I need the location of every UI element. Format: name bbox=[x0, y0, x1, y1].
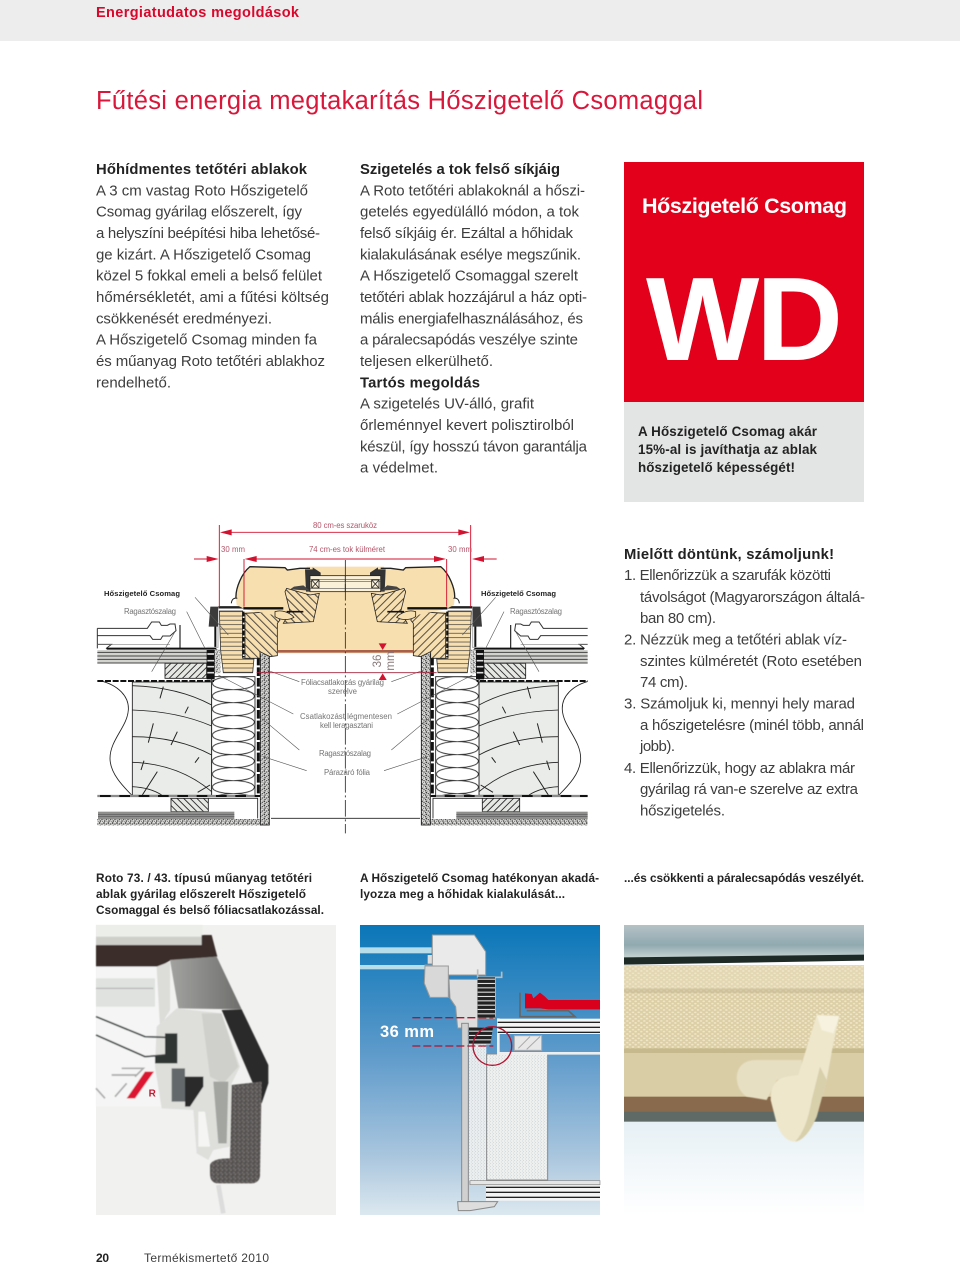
panel note: hőszigetelő képességét! bbox=[638, 460, 795, 475]
panel note: A Hőszigetelő Csomag akár bbox=[638, 424, 818, 439]
text block: thermal-bridge-free roof windows: hőmérsékletét, ami a fűtési költség bbox=[96, 289, 329, 306]
text block: insulation at frame top plane: a védelmet. bbox=[360, 460, 438, 477]
diagram dimension labels bbox=[221, 521, 472, 671]
caption: photo 2: lyozza meg a hőhidak kialakulását... bbox=[360, 887, 565, 901]
technical section diagram bbox=[97, 521, 601, 833]
text block: insulation at frame top plane: A Roto tetőtéri ablakoknál a hőszi- bbox=[360, 182, 585, 199]
diagram callout labels bbox=[104, 589, 562, 777]
diagram callout labels: Ragasztószalag bbox=[319, 749, 371, 758]
text block: thermal-bridge-free roof windows: A Hőszigetelő Csomag minden fa bbox=[96, 332, 318, 349]
section label: Energiatudatos megoldások bbox=[96, 5, 300, 21]
caption: photo 1 bbox=[96, 871, 324, 917]
text block: insulation at frame top plane: Tartós megoldás bbox=[360, 375, 480, 391]
diagram callout labels: Hőszigetelő Csomag bbox=[104, 589, 180, 598]
text block: calculation steps: jobb). bbox=[639, 738, 675, 755]
text block: calculation steps: szintes külméretét (Roto esetében bbox=[640, 653, 862, 670]
text block: thermal-bridge-free roof windows: ge kizárt. A Hőszigetelő Csomag bbox=[96, 246, 311, 263]
diagram callout labels: szerelve bbox=[328, 687, 357, 696]
diagram callout labels: Ragasztószalag bbox=[510, 607, 562, 616]
diagram dimension labels: 80 cm-es szaruköz bbox=[313, 521, 377, 530]
caption: photo 1: ablak gyárilag előszerelt Hőszigetelő bbox=[96, 887, 306, 901]
text block: thermal-bridge-free roof windows: Csomag gyárilag előszerelt, így bbox=[96, 204, 302, 221]
text block: insulation at frame top plane bbox=[360, 162, 588, 477]
diagram dimension labels: 30 mm bbox=[221, 545, 245, 554]
text block: thermal-bridge-free roof windows: csökkenését eredményezi. bbox=[96, 310, 272, 327]
text block: thermal-bridge-free roof windows: A 3 cm vastag Roto Hőszigetelő bbox=[96, 182, 308, 199]
text block: insulation at frame top plane: készül, így hosszú távon garantálja bbox=[360, 438, 588, 455]
photo: window profile cutaway bbox=[96, 925, 336, 1215]
text block: calculation steps: a hőszigetelésre (minél több, annál bbox=[640, 717, 864, 734]
diagram dimension labels: 36 bbox=[372, 655, 384, 667]
text block: calculation steps: gyárilag rá van-e szerelve az extra bbox=[640, 781, 859, 798]
diagram callout labels: Ragasztószalag bbox=[124, 607, 176, 616]
text block: calculation steps bbox=[624, 547, 865, 820]
diagram: left half construction bbox=[97, 567, 345, 825]
header bar bbox=[0, 0, 960, 41]
diagram dimension labels: 30 mm bbox=[448, 545, 472, 554]
caption: photo 1: Roto 73. / 43. típusú műanyag tetőtéri bbox=[96, 871, 312, 885]
text block: calculation steps: 3. Számoljuk ki, mennyi hely marad bbox=[624, 696, 855, 712]
text block: insulation at frame top plane: A szigetelés UV-álló, grafit bbox=[360, 396, 535, 413]
diagram callout labels: Fóliacsatlakozás gyárilag bbox=[301, 678, 384, 687]
panel: WD product box bbox=[624, 162, 864, 502]
photo: insulation section illustration bbox=[360, 925, 600, 1215]
diagram callout labels: Csatlakozást légmentesen bbox=[300, 712, 392, 721]
text block: thermal-bridge-free roof windows: a helyszíni beépítési hiba lehetősé- bbox=[96, 225, 320, 242]
text block: calculation steps: távolságot (Magyarországon általá- bbox=[640, 589, 865, 606]
text block: calculation steps: 74 cm). bbox=[640, 674, 688, 691]
logo fragment: R bbox=[149, 1089, 156, 1100]
panel note bbox=[638, 424, 818, 475]
diagram callout labels: Hőszigetelő Csomag bbox=[481, 589, 556, 598]
text block: insulation at frame top plane: mális energiafelhasználásához, és bbox=[360, 310, 583, 327]
photo: window handle close-up bbox=[624, 925, 864, 1184]
text block: calculation steps: Mielőtt döntünk, számoljunk! bbox=[624, 547, 834, 563]
caption: photo 3: ...és csökkenti a páralecsapódás veszélyét. bbox=[624, 871, 864, 885]
WD code: WD bbox=[646, 253, 840, 386]
text block: insulation at frame top plane: őrleménnyel kevert polisztirolból bbox=[360, 417, 574, 434]
diagram callout labels: Párazáró fólia bbox=[324, 768, 371, 777]
panel note: 15%-al is javíthatja az ablak bbox=[638, 442, 818, 457]
text block: calculation steps: 1. Ellenőrizzük a szarufák közötti bbox=[624, 567, 831, 584]
text block: thermal-bridge-free roof windows: közel 5 fokkal emeli a belső felület bbox=[96, 268, 323, 285]
text block: calculation steps: 2. Nézzük meg a tetőtéri ablak víz- bbox=[624, 632, 847, 648]
text block: insulation at frame top plane: a páralecsapódás veszélye szinte bbox=[360, 332, 578, 349]
text block: thermal-bridge-free roof windows bbox=[96, 162, 329, 391]
text block: calculation steps: ban 80 cm). bbox=[640, 610, 716, 627]
text block: thermal-bridge-free roof windows: és műanyag Roto tetőtéri ablakhoz bbox=[96, 353, 325, 370]
text block: thermal-bridge-free roof windows: rendelhető. bbox=[96, 374, 171, 391]
title: Fűtési energia megtakarítás Hőszigetelő Csomaggal bbox=[96, 87, 703, 115]
diagram callout labels: kell leragasztani bbox=[320, 721, 373, 730]
text block: calculation steps: 4. Ellenőrizzük, hogy az ablakra már bbox=[624, 760, 855, 777]
text block: thermal-bridge-free roof windows: Hőhídmentes tetőtéri ablakok bbox=[96, 162, 308, 178]
panel heading: Hőszigetelő Csomag bbox=[642, 194, 847, 218]
text block: insulation at frame top plane: A Hőszigetelő Csomaggal szerelt bbox=[360, 268, 579, 285]
diagram: right half construction (mirror) bbox=[345, 567, 593, 825]
diagram dimension labels: mm bbox=[385, 651, 397, 671]
text block: insulation at frame top plane: teljesen elkerülhető. bbox=[360, 353, 493, 370]
caption: photo 2: A Hőszigetelő Csomag hatékonyan akadá- bbox=[360, 871, 599, 885]
text block: insulation at frame top plane: felső síkjáig ér. Ezáltal a hőhidak bbox=[360, 225, 574, 242]
caption: photo 2 bbox=[360, 871, 599, 901]
diagram dimension labels: 74 cm-es tok külméret bbox=[309, 545, 386, 554]
text block: insulation at frame top plane: getelés egyedülálló módon, a tok bbox=[360, 204, 580, 221]
caption: photo 1: Csomaggal és belső fóliacsatlakozással. bbox=[96, 903, 324, 917]
dimension label: 36 mm bbox=[380, 1023, 434, 1041]
text block: calculation steps: hőszigetelés. bbox=[640, 802, 725, 820]
text block: insulation at frame top plane: Szigetelés a tok felső síkjáig bbox=[360, 162, 560, 178]
dimension lines bbox=[194, 525, 497, 680]
text block: insulation at frame top plane: kialakulásának esélye megszűnik. bbox=[360, 246, 581, 263]
text block: insulation at frame top plane: tetőtéri ablak hozzájárul a ház opti- bbox=[360, 289, 587, 306]
